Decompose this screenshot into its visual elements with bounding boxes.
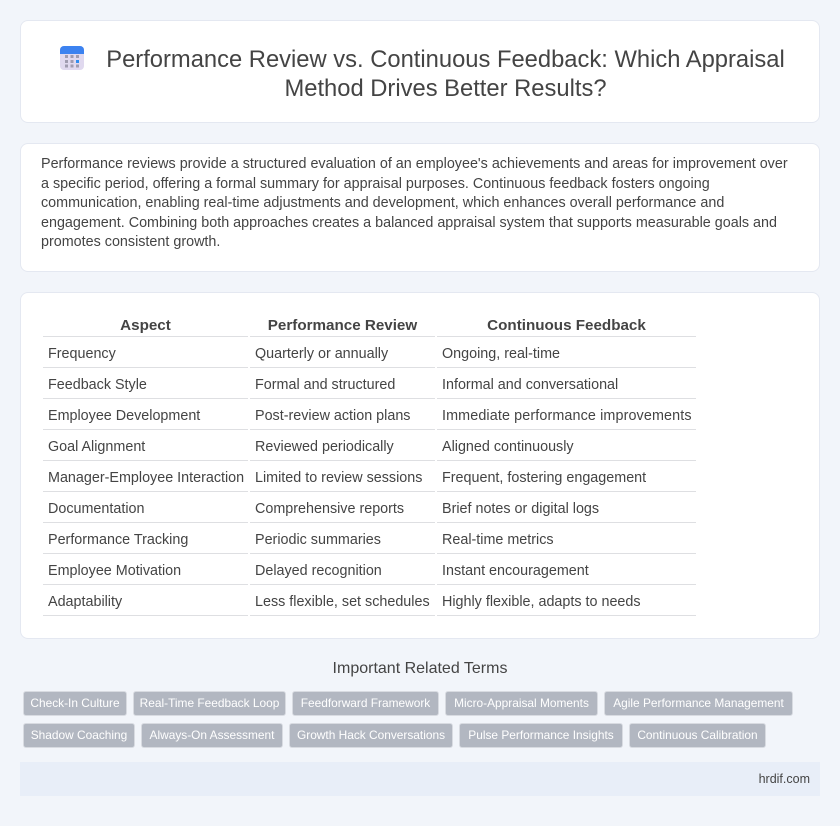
summary text: Performance reviews provide a structured evaluation of an employee's achievements and areas for improvement over xyxy=(41,156,788,172)
tag: Micro-Appraisal Moments xyxy=(454,696,589,710)
tag: Pulse Performance Insights xyxy=(468,728,614,742)
row: performance tracking: Periodic summaries xyxy=(255,532,381,548)
tag xyxy=(133,691,286,716)
table header: performance review: Performance Review xyxy=(268,317,417,334)
row: feedback style: Formal and structured xyxy=(255,377,395,393)
summary text: communication, enabling real-time adjustments and development, which enhances overall performance and xyxy=(41,195,724,211)
tag: Agile Performance Management xyxy=(613,696,784,710)
title xyxy=(106,46,785,102)
panel: comparison table xyxy=(20,292,820,639)
row: performance tracking: Performance Tracking xyxy=(48,532,188,548)
row: adaptability xyxy=(48,594,641,610)
row: feedback style xyxy=(48,377,618,393)
row: employee motivation: Delayed recognition xyxy=(255,563,382,579)
heading: important related terms: Important Related Terms xyxy=(333,660,507,677)
footer source: hrdif.com xyxy=(759,772,810,786)
table header: continuous feedback: Continuous Feedback xyxy=(487,317,646,334)
row: manager-employee interaction: Limited to review sessions xyxy=(255,470,422,486)
row: manager-employee interaction xyxy=(48,470,646,486)
tag xyxy=(445,691,598,716)
row: feedback style: Feedback Style xyxy=(48,377,147,393)
row: employee motivation: Employee Motivation xyxy=(48,563,181,579)
title: Method Drives Better Results? xyxy=(284,75,607,102)
tag xyxy=(292,691,439,716)
icon: calendar xyxy=(60,46,84,70)
tag xyxy=(629,723,766,748)
tag: Shadow Coaching xyxy=(31,728,127,742)
row: employee motivation xyxy=(48,563,589,579)
row: frequency: Frequency xyxy=(48,346,116,362)
row: goal alignment: Reviewed periodically xyxy=(255,439,394,455)
row: documentation: Documentation xyxy=(48,501,144,517)
row: feedback style: Informal and conversational xyxy=(442,377,618,393)
row: frequency: Ongoing, real-time xyxy=(442,346,560,362)
row: documentation: Comprehensive reports xyxy=(255,501,404,517)
row: documentation: Brief notes or digital logs xyxy=(442,501,599,517)
tag xyxy=(604,691,793,716)
summary text: a specific period, offering a formal summary for appraisal purposes. Continuous feedback fosters ongoing xyxy=(41,176,710,192)
row: adaptability: Adaptability xyxy=(48,594,122,610)
tag: Continuous Calibration xyxy=(637,728,758,742)
row: frequency xyxy=(48,346,560,362)
tag: Check-In Culture xyxy=(30,696,120,710)
tag xyxy=(459,723,623,748)
row: employee motivation: Instant encouragement xyxy=(442,563,589,579)
tag xyxy=(23,691,127,716)
summary text xyxy=(41,156,788,250)
tag xyxy=(23,723,135,748)
tag xyxy=(141,723,283,748)
summary text: promotes consistent growth. xyxy=(41,234,220,250)
title: Performance Review vs. Continuous Feedback: Which Appraisal xyxy=(106,46,785,73)
row: frequency: Quarterly or annually xyxy=(255,346,388,362)
header panel xyxy=(20,20,820,123)
row: goal alignment xyxy=(48,439,574,455)
table header: aspect: Aspect xyxy=(120,317,171,334)
row: goal alignment: Aligned continuously xyxy=(442,439,574,455)
row: manager-employee interaction: Manager-Employee Interaction xyxy=(48,470,244,486)
footer xyxy=(20,762,820,796)
tag xyxy=(289,723,453,748)
tag: Feedforward Framework xyxy=(301,696,430,710)
row: employee development: Employee Development xyxy=(48,408,200,424)
row: employee development: Immediate performance improvements xyxy=(442,408,692,424)
row: manager-employee interaction: Frequent, fostering engagement xyxy=(442,470,646,486)
tag: Always-On Assessment xyxy=(150,728,274,742)
tag: Growth Hack Conversations xyxy=(297,728,445,742)
row: performance tracking: Real-time metrics xyxy=(442,532,554,548)
row: performance tracking xyxy=(48,532,554,548)
tag: Real-Time Feedback Loop xyxy=(140,696,279,710)
row: adaptability: Less flexible, set schedules xyxy=(255,594,430,610)
row: goal alignment: Goal Alignment xyxy=(48,439,145,455)
summary text: engagement. Combining both approaches creates a balanced appraisal system that supports measurable goals and xyxy=(41,214,777,230)
row: adaptability: Highly flexible, adapts to needs xyxy=(442,594,641,610)
row: employee development: Post-review action plans xyxy=(255,408,410,424)
panel: summary xyxy=(20,143,820,272)
row: documentation xyxy=(48,501,599,517)
row: employee development xyxy=(48,408,692,424)
